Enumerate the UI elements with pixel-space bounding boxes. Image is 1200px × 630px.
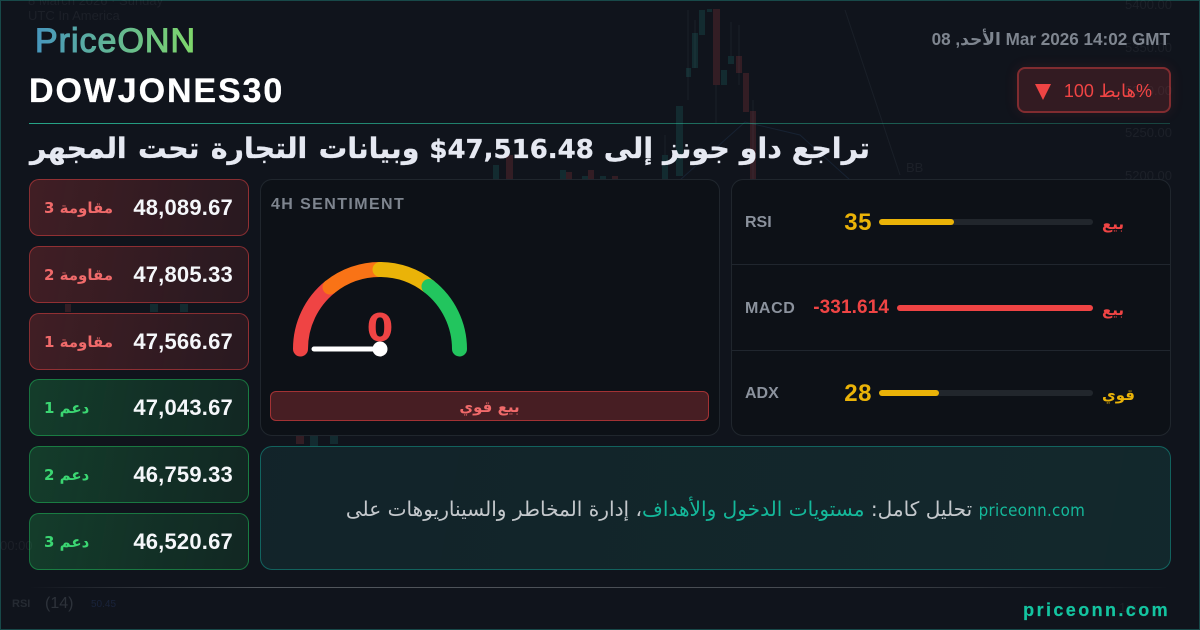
level: support 3: 46,520.67 — [133, 529, 233, 554]
sentiment heading: 4H SENTIMENT — [271, 196, 405, 213]
row: RSI: بيع — [1102, 215, 1124, 233]
level: resistance 1: مقاومة 1 — [44, 333, 113, 351]
level: support 3: دعم 3 — [44, 533, 89, 551]
background candlestick chart: 1m — [1119, 600, 1137, 615]
footer url: priceonn.com — [1023, 600, 1170, 620]
footer divider — [29, 587, 1170, 588]
logo: PriceONN — [35, 22, 196, 60]
panel: analysis callout: تحليل كامل: مستويات الدخول والأهداف، إدارة المخاطر والسيناريوهات على priceonn.com — [346, 497, 1085, 521]
background candlestick chart: RSI — [12, 598, 30, 610]
row: RSI — [732, 180, 1170, 265]
row: ADX: ADX — [745, 385, 779, 402]
sentiment gauge: 0 — [367, 306, 393, 350]
symbol heading: DOWJONES30 — [29, 72, 284, 110]
row: MACD: -331.614 — [813, 297, 889, 318]
header divider — [29, 123, 1170, 124]
level: support 2 — [29, 446, 249, 503]
headline: تراجع داو جونز إلى 47,516.48$ وبيانات التجارة تحت المجهر — [30, 132, 870, 165]
row: ADX — [745, 380, 1135, 407]
panel: analysis callout — [260, 446, 1171, 570]
level: resistance 2: مقاومة 2 — [44, 266, 113, 284]
row: MACD — [732, 265, 1170, 351]
trend text: هابط 100% — [1064, 81, 1152, 101]
level: support 3 — [29, 513, 249, 570]
background candlestick chart: 50.45 — [91, 599, 116, 610]
level: resistance 2: 47,805.33 — [133, 262, 233, 287]
panel: indicators — [731, 179, 1171, 436]
level: support 1: دعم 1 — [44, 399, 89, 417]
sentiment verdict badge — [270, 391, 709, 421]
row: MACD: MACD — [745, 300, 795, 317]
background candlestick chart: 5350.00 — [1125, 40, 1172, 55]
level: resistance 2 — [29, 246, 249, 303]
level: resistance 3: مقاومة 3 — [44, 199, 113, 217]
background candlestick chart: BB — [906, 160, 923, 175]
trend badge — [1017, 67, 1171, 113]
row: ADX: 28 — [844, 380, 872, 407]
background candlestick chart: 5250.00 — [1125, 125, 1172, 140]
level: support 1 — [29, 379, 249, 436]
background candlestick chart: 00:00 — [0, 538, 33, 553]
level: resistance 1 — [29, 313, 249, 370]
level: support 2: 46,759.33 — [133, 462, 233, 487]
row: MACD: بيع — [1102, 301, 1124, 319]
level: support 2: دعم 2 — [44, 466, 89, 484]
row: ADX: قوي — [1102, 386, 1135, 404]
sentiment gauge — [293, 262, 467, 356]
background candlestick chart: 5200.00 — [1125, 168, 1172, 183]
sentiment verdict badge: بيع قوي — [459, 398, 520, 416]
icon: down triangle — [1035, 84, 1051, 100]
panel: sentiment — [260, 179, 720, 436]
background candlestick chart: (14) — [45, 595, 73, 612]
row: RSI: RSI — [745, 214, 772, 231]
row: RSI: 35 — [844, 209, 872, 236]
level: resistance 1: 47,566.67 — [133, 329, 233, 354]
level: resistance 3: 48,089.67 — [133, 195, 233, 220]
date and time: الأحد, 08 Mar 2026 14:02 GMT — [932, 30, 1170, 49]
level: resistance 3 — [29, 179, 249, 236]
level: support 1: 47,043.67 — [133, 395, 233, 420]
background candlestick chart: UTC In America — [28, 8, 121, 23]
background candlestick chart: 5300.00 — [1125, 83, 1172, 98]
